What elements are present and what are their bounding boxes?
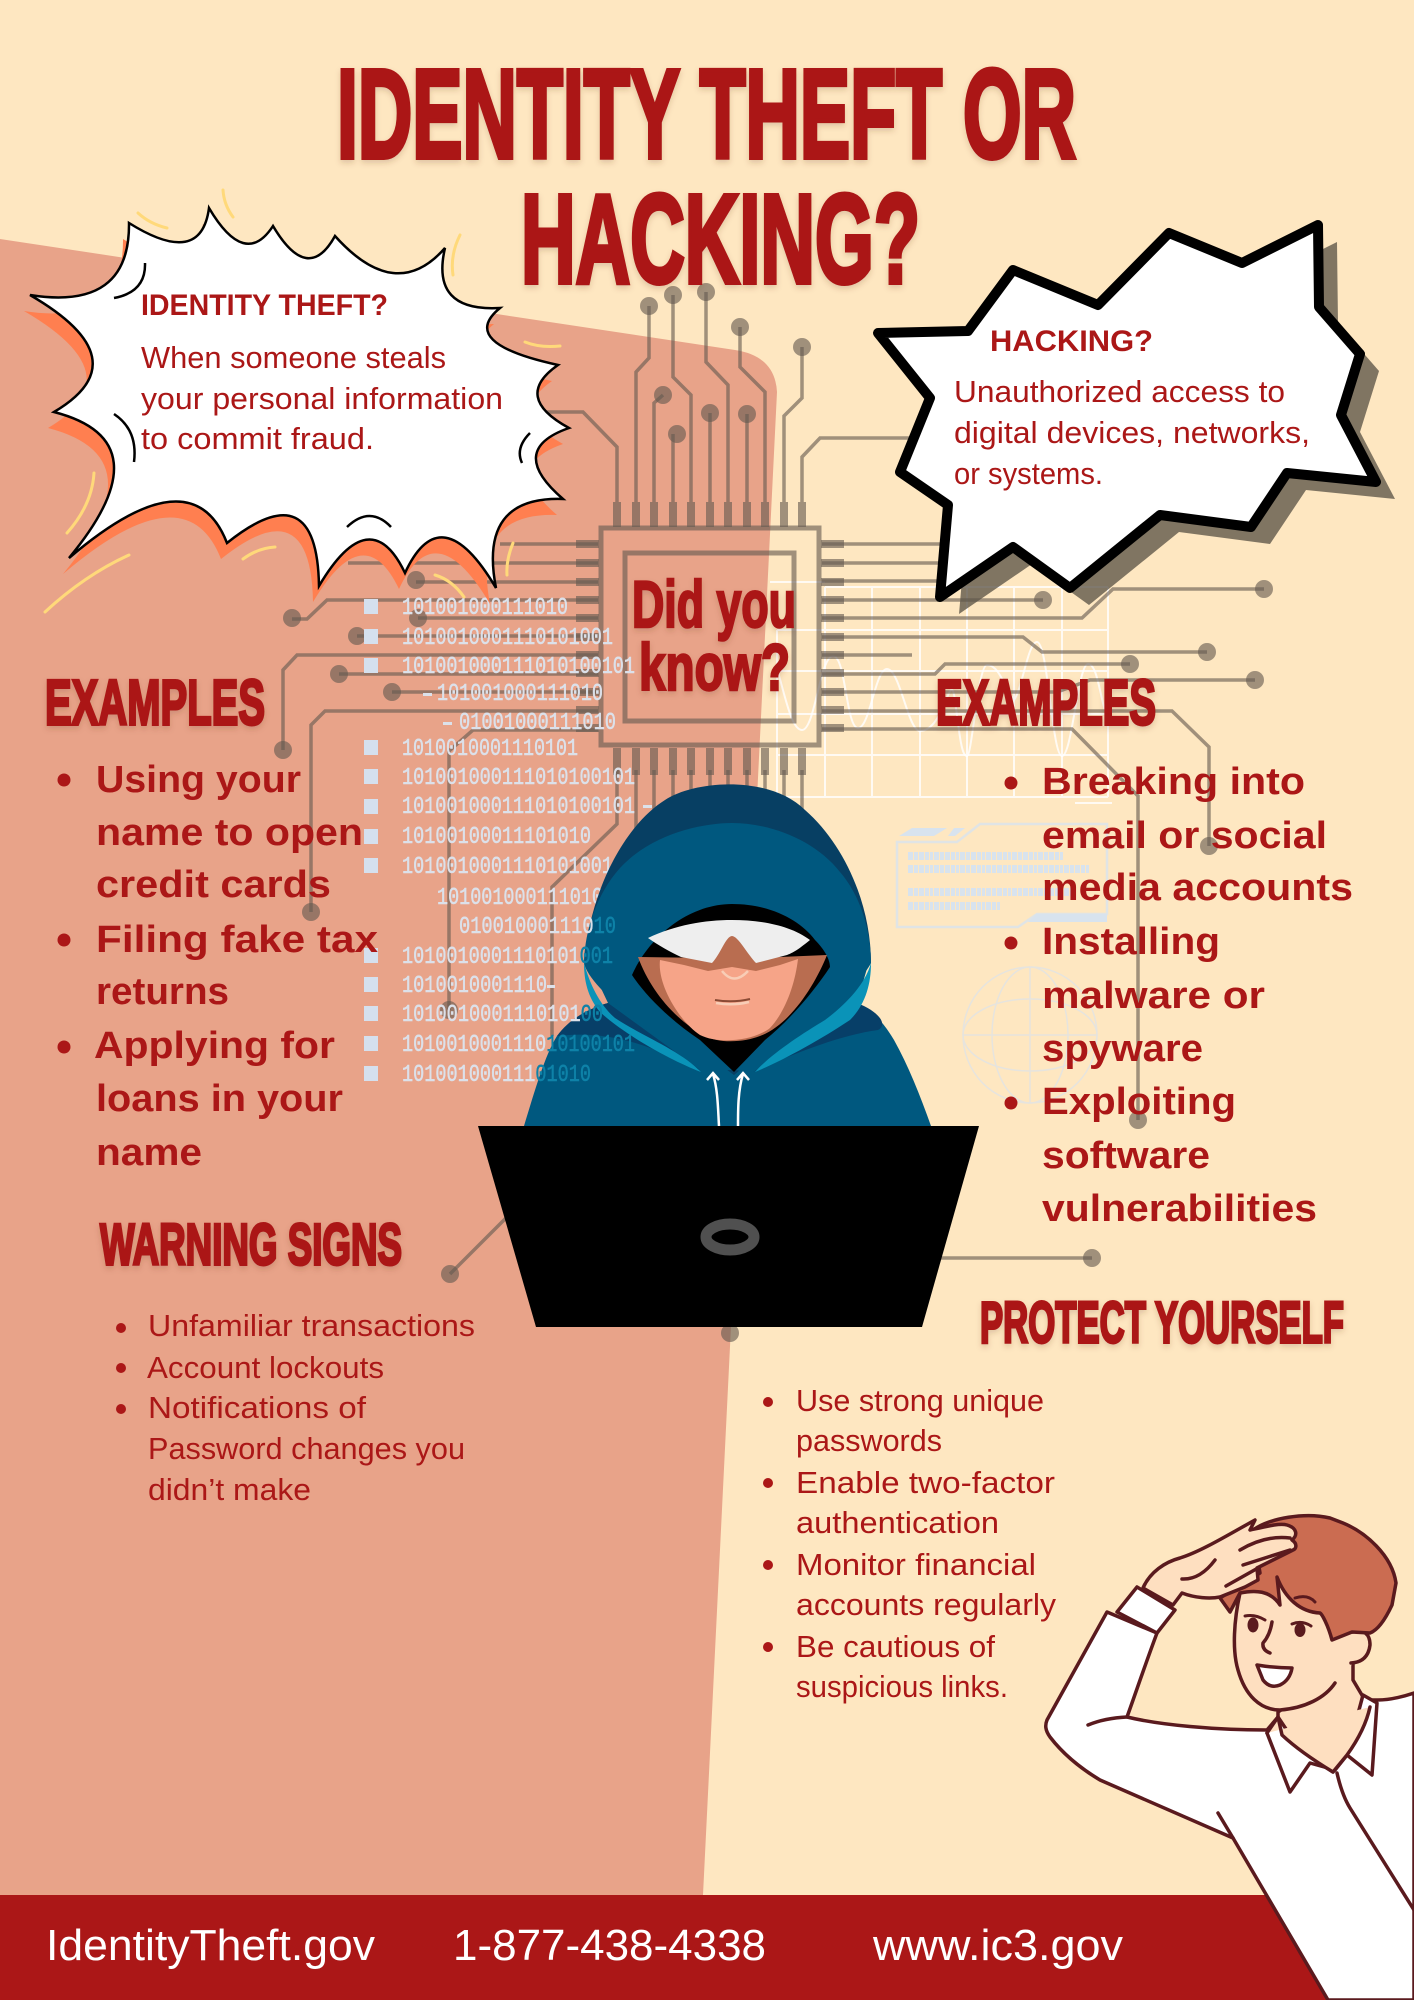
laptop logo: [706, 1224, 754, 1250]
list: warning signs: Unfamiliar transactions: [148, 1308, 475, 1343]
list: hacking examples: Breaking into: [1042, 761, 1305, 803]
binary code continuing over the hood: 01001000111010: [459, 914, 616, 941]
mouth: [1257, 1665, 1292, 1686]
background: salmon panel: [0, 239, 777, 1895]
burst body text: [141, 340, 503, 456]
list: hacking examples: software: [1042, 1135, 1210, 1177]
teal piping: [584, 963, 871, 1072]
list: protect yourself: Use strong unique: [796, 1383, 1044, 1418]
list: protect yourself: Enable two-factor: [796, 1465, 1055, 1500]
burst body text: your personal information: [141, 381, 503, 416]
title: HACKING?: [521, 168, 920, 310]
list: identity theft examples: Applying for: [94, 1025, 335, 1067]
list: protect yourself: passwords: [796, 1423, 942, 1458]
chip inner square: [625, 553, 794, 721]
binary code continuing over the hood: 1010010001110101001: [402, 944, 613, 971]
saluting man illustration: [1046, 1516, 1414, 2000]
interface panel graphic: [897, 824, 1107, 927]
binary code continuing over the hood: 101001000111010100101: [402, 1032, 635, 1059]
neck: [1278, 1660, 1372, 1772]
title: [337, 44, 1076, 310]
burst body text: Unauthorized access to: [954, 374, 1285, 409]
binary code column: [364, 595, 652, 1081]
heading: warning signs: WARNING SIGNS: [100, 1212, 402, 1278]
binary code column: 101001000111010100101: [402, 794, 635, 821]
list: identity theft examples: credit cards: [96, 864, 331, 906]
list: hacking examples: malware or: [1042, 975, 1265, 1017]
laptop: [478, 1126, 979, 1327]
list: warning signs: Notifications of: [148, 1390, 366, 1425]
list: warning signs: [116, 1308, 475, 1507]
burst shadow: [897, 242, 1395, 614]
burst body text: or systems.: [954, 456, 1103, 491]
footer contact links: www.ic3.gov: [872, 1921, 1123, 1970]
list: hacking examples: Installing: [1042, 921, 1220, 963]
did you know label: know?: [639, 630, 790, 704]
hair: [1220, 1516, 1396, 1640]
list: identity theft examples: [58, 759, 378, 1174]
burst body text: digital devices, networks,: [954, 415, 1310, 450]
face shadow side: [638, 930, 827, 1041]
list: warning signs: Account lockouts: [147, 1350, 384, 1385]
eyes and brows: [1248, 1618, 1258, 1632]
right wires: [822, 544, 1264, 1120]
list: hacking examples: spyware: [1042, 1028, 1203, 1070]
goggles: [648, 920, 810, 963]
list: hacking examples: vulnerabilities: [1042, 1188, 1317, 1230]
binary code column: 1010010001110101001: [402, 854, 613, 881]
left wires: [283, 544, 598, 1010]
circuit board: microchip and wires: [274, 283, 1273, 1342]
footer contact links: 1-877-438-4338: [453, 1921, 766, 1970]
white burst: [878, 225, 1376, 597]
heading: examples left: EXAMPLES: [45, 666, 265, 738]
burst accents: [45, 190, 560, 612]
footer contact links: IdentityTheft.gov: [46, 1921, 375, 1970]
list: protect yourself: authentication: [796, 1505, 999, 1540]
binary code continuing over the hood: [402, 914, 635, 1089]
did you know label: [632, 567, 796, 704]
hoodie shoulder shadows: [557, 1003, 882, 1072]
shirt: [1046, 1612, 1414, 2000]
burst heading: HACKING?: [990, 325, 1153, 358]
binary code continuing over the hood: 1010010001110: [402, 973, 547, 1000]
list: warning signs: didn’t make: [148, 1472, 311, 1507]
top wires: [547, 292, 930, 502]
white burst: [30, 208, 569, 588]
speech burst: identity theft: [24, 190, 569, 612]
ear: [1351, 1631, 1370, 1663]
heading: examples right: EXAMPLES: [936, 666, 1156, 738]
chip pins: [576, 502, 844, 775]
list: identity theft examples: name: [96, 1132, 202, 1174]
list: hacking examples: media accounts: [1042, 867, 1353, 909]
binary code column: 1010010001110101: [402, 736, 578, 763]
collar: [1267, 1695, 1377, 1792]
sleeve lines: [1088, 1717, 1414, 1910]
binary code column: 101001000111010100101: [402, 765, 635, 792]
binary code column: 101001000111010: [437, 885, 603, 912]
list: hacking examples: email or social: [1042, 815, 1327, 857]
face: [1234, 1560, 1372, 1710]
chart grid with sine wave: [770, 582, 1112, 803]
binary code column: 101001000111010: [437, 681, 603, 708]
hand: [1143, 1520, 1296, 1605]
chip outline: [601, 528, 819, 745]
hood inner: [584, 823, 871, 1072]
face: [660, 959, 798, 1040]
hood outer: [584, 784, 871, 1075]
hoodie strings: [707, 1073, 749, 1126]
list: identity theft examples: Using your: [96, 759, 301, 801]
binary code column: 1010010001110101001: [402, 625, 613, 652]
binary code column: 101001000111010100101: [402, 654, 635, 681]
list: identity theft examples: loans in your: [96, 1078, 343, 1120]
list: identity theft examples: Filing fake tax: [96, 919, 378, 961]
burst body text: [954, 374, 1310, 491]
list: hacking examples: Exploiting: [1042, 1081, 1236, 1123]
list: protect yourself: Monitor financial: [796, 1547, 1036, 1582]
binary code column: 10100100011101010: [402, 824, 591, 851]
list: protect yourself: [763, 1383, 1057, 1704]
binary code column: 01001000111010: [459, 710, 616, 737]
face opening: [632, 904, 830, 1072]
binary code continuing over the hood: 101001000111010100: [402, 1002, 603, 1029]
wire end dots: [274, 283, 1273, 1342]
burst body text: to commit fraud.: [141, 421, 374, 456]
speech burst: hacking: [878, 225, 1395, 614]
nose: [1263, 1622, 1272, 1653]
hooded hacker figure: [524, 784, 931, 1126]
burst heading: IDENTITY THEFT?: [141, 289, 388, 322]
list: identity theft examples: returns: [96, 971, 229, 1013]
list: identity theft examples: name to open: [96, 812, 363, 854]
cuff: [1117, 1587, 1175, 1633]
bottom wires: [552, 770, 802, 1036]
laptop wires: [450, 1214, 1092, 1274]
binary code continuing over the hood: 10100100011101010: [402, 1062, 591, 1089]
burst body text: When someone steals: [141, 340, 446, 375]
list: protect yourself: accounts regularly: [796, 1587, 1057, 1622]
orange burst shadow: [24, 224, 563, 604]
nose and mouth: [716, 971, 749, 1004]
list: protect yourself: suspicious links.: [796, 1669, 1008, 1704]
footer bar: [0, 1895, 1414, 2000]
binary code column: 101001000111010: [402, 595, 568, 622]
footer contact links: [46, 1921, 1123, 1970]
globe graphic: [963, 967, 1097, 1103]
list: hacking examples: [1004, 761, 1353, 1230]
list: protect yourself: Be cautious of: [796, 1629, 995, 1664]
list: warning signs: Password changes you: [148, 1431, 465, 1466]
did you know label: Did you: [632, 567, 796, 641]
hoodie body: [524, 965, 931, 1126]
